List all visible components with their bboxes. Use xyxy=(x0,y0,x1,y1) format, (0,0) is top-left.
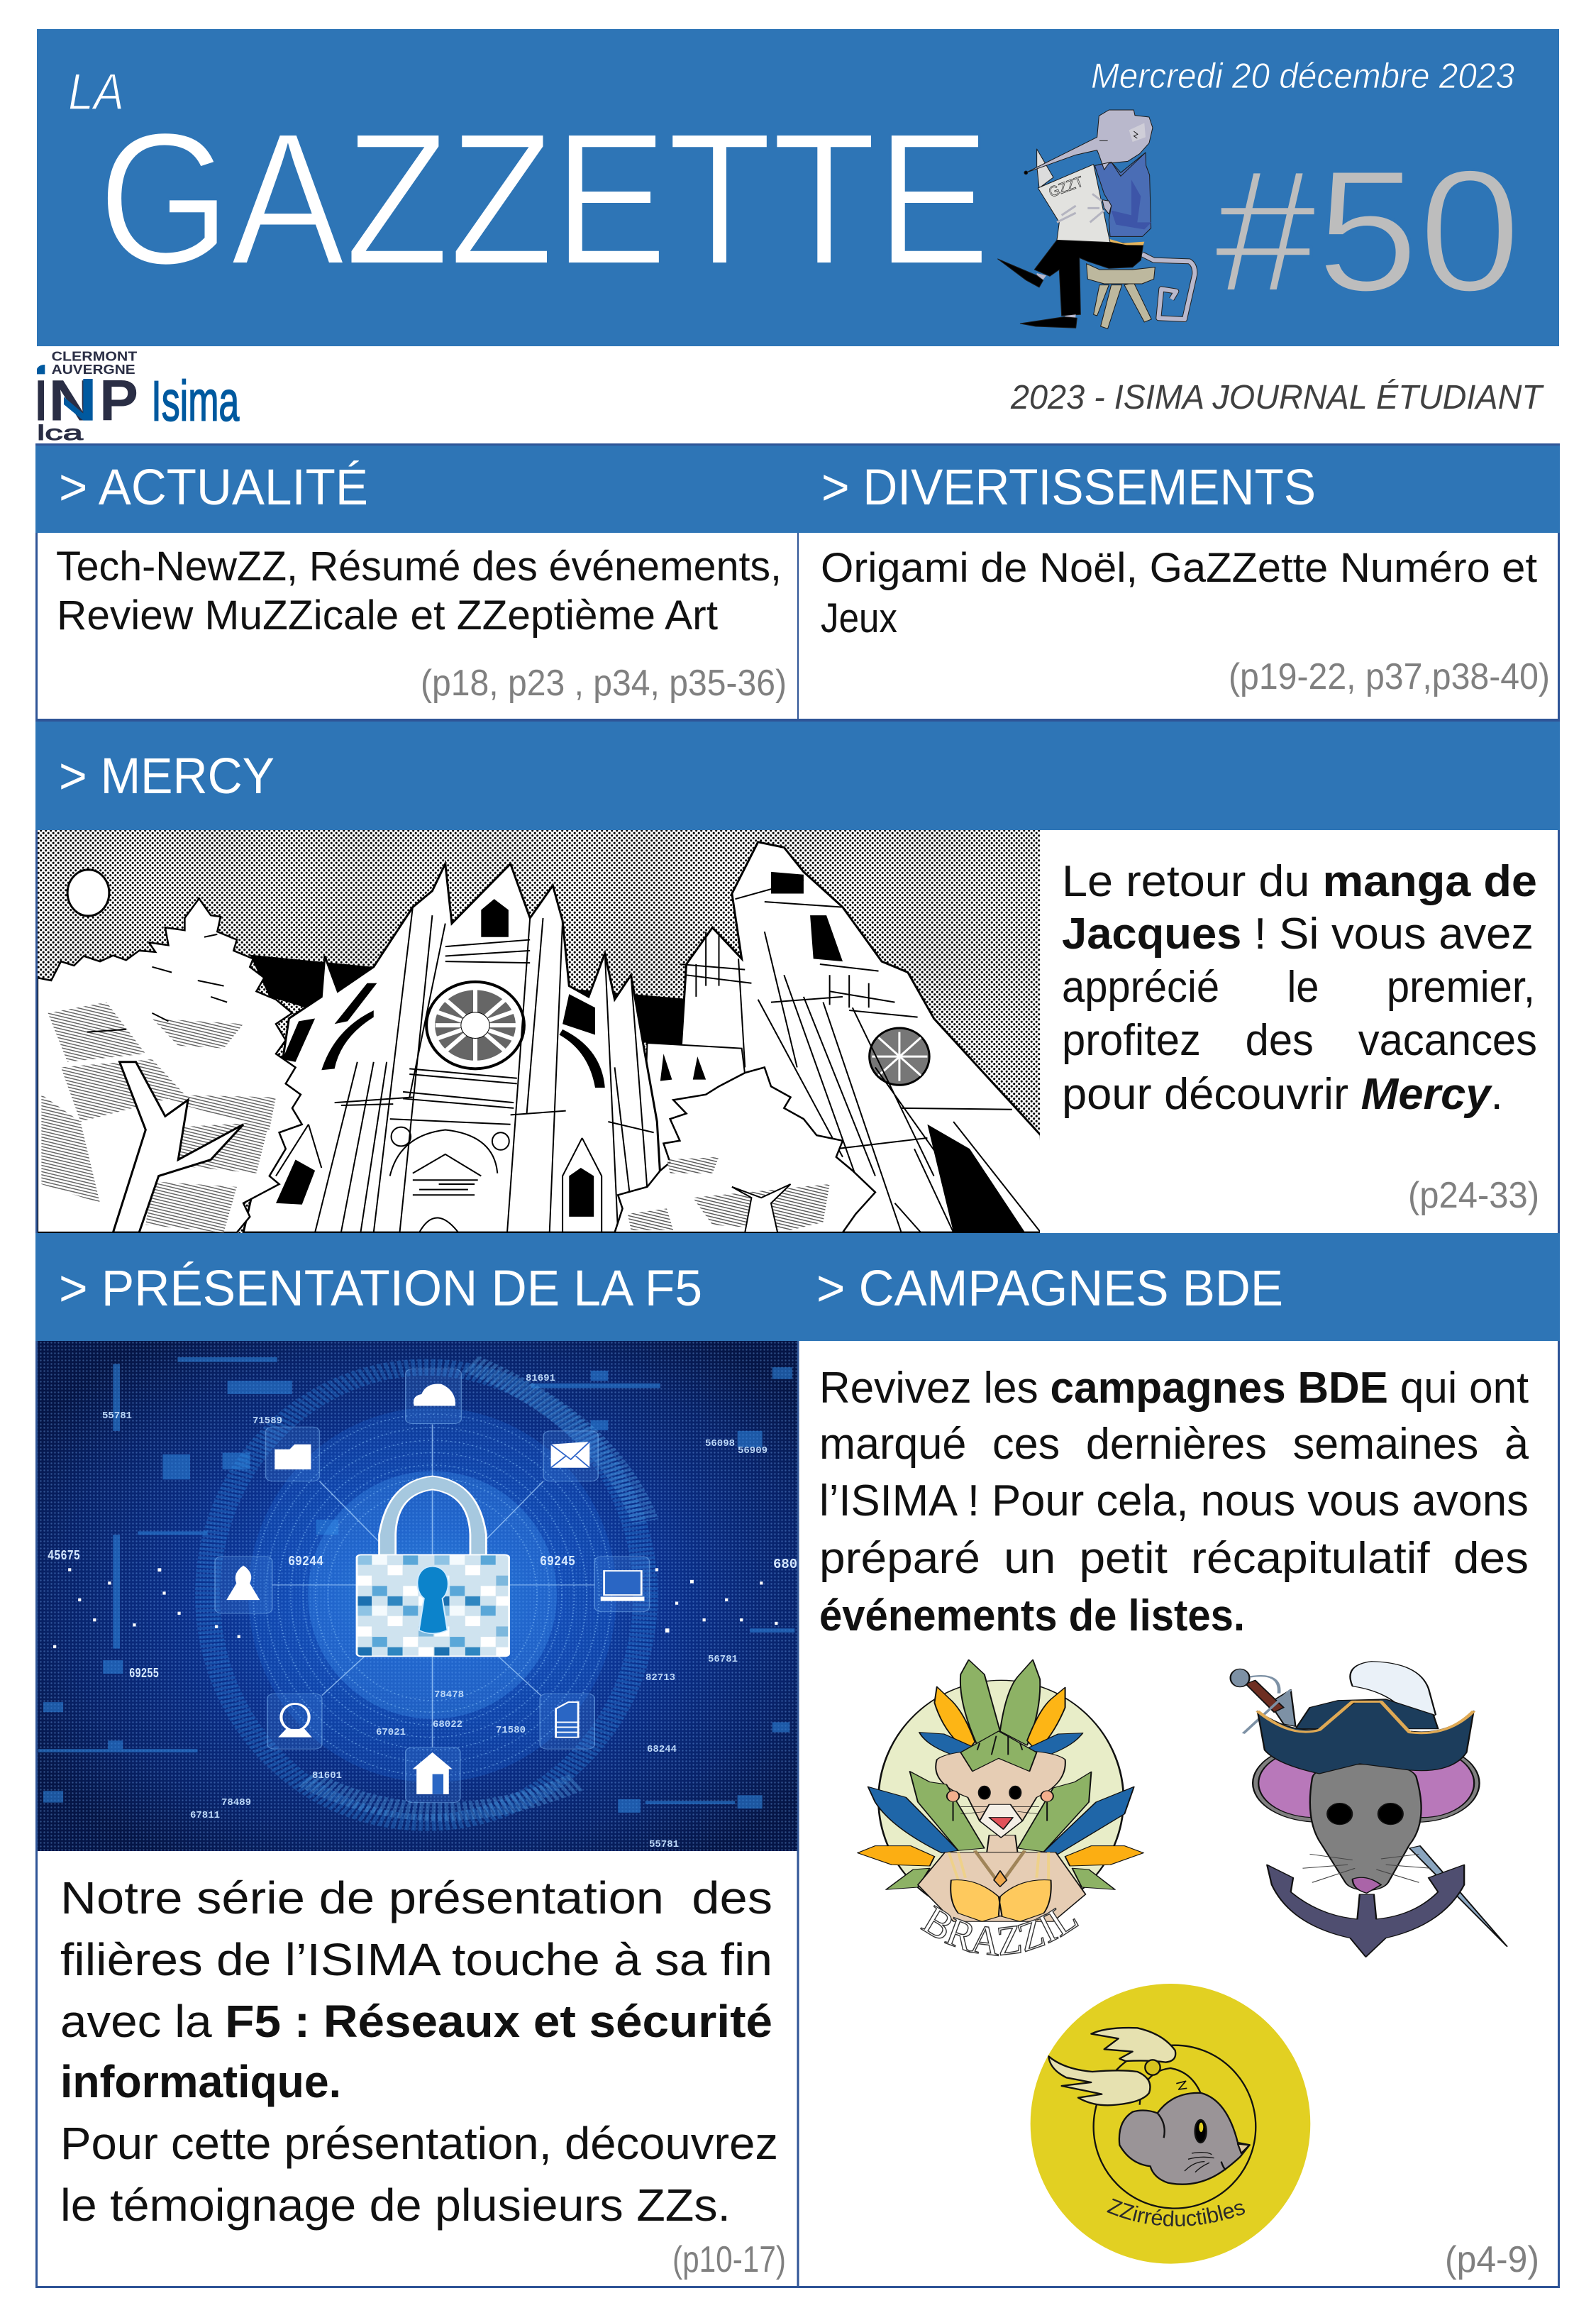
numbers in padlock image: 68244 xyxy=(647,1744,677,1755)
numbers in padlock image: 55781 xyxy=(102,1410,132,1422)
text block: actualité summary: Tech-NewZZ, Résumé des événements, xyxy=(56,543,782,590)
text block: campagnes summary: marqué ces dernières semaines à xyxy=(819,1420,1529,1469)
icon tiles xyxy=(215,1369,649,1803)
logo: Clermont Auvergne INP Isima: AUVERGNE xyxy=(52,362,135,377)
mail icon xyxy=(551,1442,589,1468)
numbers in padlock image xyxy=(48,1373,806,1850)
page reference: divertissements: (p19-22, p37,p38-40) xyxy=(1229,656,1550,697)
logo: Brazzil list xyxy=(857,1659,1145,1957)
sparkles xyxy=(53,1568,777,1648)
text block: mercy summary: profitez des vacances xyxy=(1062,1016,1537,1065)
heading: mercy: > MERCY xyxy=(59,749,275,805)
heading: actualité: > ACTUALITÉ xyxy=(59,460,368,516)
page reference: campagnes BDE: (p4-9) xyxy=(1445,2239,1539,2280)
numbers in padlock image: 68022 xyxy=(433,1719,462,1730)
text block: mercy summary: apprécié le premier, xyxy=(1062,963,1535,1012)
numbers in padlock image: 56909 xyxy=(738,1445,767,1457)
newspaper title: GZZT xyxy=(1046,173,1086,201)
text block: actualité summary xyxy=(56,543,782,639)
rose windows xyxy=(426,982,524,1068)
logo: Clermont Auvergne INP Isima xyxy=(35,349,240,445)
issue number: #50 xyxy=(1214,133,1521,328)
numbers in padlock image: 67021 xyxy=(376,1727,406,1738)
radial dot moire xyxy=(253,1414,611,1776)
numbers in padlock image: 69245 xyxy=(540,1554,575,1569)
illustration: digital security padlock xyxy=(38,1341,806,1851)
numbers in padlock image: 69244 xyxy=(288,1554,323,1569)
manga illustration: cathedral xyxy=(38,830,1045,1233)
document icon xyxy=(556,1702,578,1738)
heading: campagnes BDE: > CAMPAGNES BDE xyxy=(816,1261,1283,1317)
text block: campagnes summary: Revivez les campagnes BDE qui ont xyxy=(819,1364,1529,1413)
logo: Clermont Auvergne INP Isima: Isima xyxy=(151,370,240,433)
numbers in padlock image: 69255 xyxy=(129,1666,159,1681)
mouse head xyxy=(1119,2093,1250,2185)
text block: F5 presentation xyxy=(60,1872,778,2231)
data blocks xyxy=(38,1357,794,1813)
numbers in padlock image: 56781 xyxy=(708,1654,738,1665)
heading: présentation F5: > PRÉSENTATION DE LA F5 xyxy=(59,1261,702,1317)
text block: campagnes summary: l’ISIMA ! Pour cela, nous vous avons xyxy=(819,1476,1529,1525)
text block: mercy summary xyxy=(1062,857,1537,1119)
numbers in padlock image: 71589 xyxy=(253,1415,282,1427)
circular data ring xyxy=(208,1367,645,1823)
numbers in padlock image: 55781 xyxy=(649,1839,679,1850)
moon xyxy=(67,870,109,916)
wings xyxy=(1091,2028,1175,2062)
tree group right xyxy=(615,1067,875,1232)
logo: ZZirréductibles list xyxy=(1030,1984,1311,2264)
padlock xyxy=(379,1476,486,1562)
stained windows and openings xyxy=(276,872,1025,1232)
numbers in padlock image: 6802 xyxy=(773,1557,806,1572)
cloud icon xyxy=(414,1384,455,1405)
folder icon xyxy=(275,1445,311,1469)
logo: Clermont Auvergne INP Isima: P xyxy=(99,369,138,433)
text block: mercy summary: Le retour du manga de xyxy=(1062,857,1537,906)
text block: divertissements summary xyxy=(821,545,1537,641)
numbers in padlock image: 82713 xyxy=(645,1672,675,1684)
text block: divertissements summary: Jeux xyxy=(821,595,897,641)
facade lines xyxy=(315,907,1041,1232)
numbers in padlock image: 67811 xyxy=(190,1810,220,1821)
page frame with section panels xyxy=(35,443,1560,2287)
icon: mascot mouse reading newspaper xyxy=(998,110,1195,328)
page reference: actualité: (p18, p23 , p34, p35-36) xyxy=(421,663,787,704)
text block: F5 presentation: informatique. xyxy=(60,2056,341,2107)
numbers in padlock image: 81601 xyxy=(312,1770,342,1782)
text block: mercy summary: pour découvrir Mercy. xyxy=(1062,1070,1503,1119)
laptop icon xyxy=(604,1571,641,1595)
logo: Clermont Auvergne INP Isima: lca xyxy=(37,421,84,445)
numbers in padlock image: 45675 xyxy=(48,1548,80,1564)
page reference: mercy: (p24-33) xyxy=(1408,1175,1539,1216)
person icon xyxy=(226,1566,260,1600)
numbers in padlock image: 78489 xyxy=(221,1797,251,1808)
text block: F5 presentation: avec la F5 : Réseaux et sécurité xyxy=(60,1996,772,2047)
lettering: ZZirréductibles: ZZirréductibles xyxy=(1107,2198,1245,2226)
portal arches xyxy=(276,1125,602,1232)
text block: F5 presentation: Pour cette présentation, découvrez xyxy=(60,2118,778,2169)
numbers in padlock image: 71580 xyxy=(496,1725,526,1736)
logo: Clermont Auvergne INP Isima: I xyxy=(35,369,47,433)
logo: Clermont Auvergne INP Isima: N xyxy=(48,369,94,433)
text block: actualité summary: Review MuZZicale et ZZeptième Art xyxy=(57,592,718,639)
page reference: F5: (p10-17) xyxy=(672,2239,786,2280)
house icon xyxy=(413,1752,453,1794)
tree group left xyxy=(38,898,302,1232)
text block: mercy summary: Jacques ! Si vous avez xyxy=(1062,910,1534,959)
numbers in padlock image: 81691 xyxy=(526,1373,555,1384)
text block: F5 presentation: le témoignage de plusieurs ZZs. xyxy=(60,2180,731,2231)
network spokes xyxy=(272,1424,594,1747)
subtitle: journal label: 2023 - ISIMA JOURNAL ÉTUDIANT xyxy=(1010,379,1545,416)
numbers in padlock image: 78478 xyxy=(434,1689,464,1701)
title: GAZZETTE: GAZZETTE xyxy=(98,94,990,304)
text block: F5 presentation: Notre série de présentation des xyxy=(60,1872,772,1923)
logo lettering: Brazzil: BRAZZIL xyxy=(920,1904,1079,1957)
logo: pirate mouse list xyxy=(1231,1662,1507,1957)
numbers in padlock image: 56098 xyxy=(705,1438,735,1449)
issue date: Mercredi 20 décembre 2023 xyxy=(1091,56,1514,96)
header banner xyxy=(37,29,1559,346)
heading: divertissements: > DIVERTISSEMENTS xyxy=(821,460,1316,516)
text block: F5 presentation: filières de l’ISIMA touche à sa fin xyxy=(60,1934,772,1985)
text block: campagnes summary: préparé un petit récapitulatif des xyxy=(819,1534,1529,1583)
panel: actualité xyxy=(56,460,787,704)
text block: campagnes summary: événements de listes. xyxy=(819,1591,1245,1640)
panel: divertissements xyxy=(821,460,1550,697)
panel: mercy xyxy=(38,749,1539,1233)
webcam icon xyxy=(281,1703,309,1730)
text block: campagnes summary xyxy=(819,1364,1529,1640)
text block: divertissements summary: Origami de Noël, GaZZette Numéro et xyxy=(821,545,1537,591)
title prefix: LA: LA xyxy=(68,64,124,121)
logo: Clermont Auvergne INP Isima: CLERMONT xyxy=(52,349,138,364)
panel: présentation de la F5 xyxy=(38,1261,806,2280)
panel: campagnes BDE xyxy=(816,1261,1539,2280)
